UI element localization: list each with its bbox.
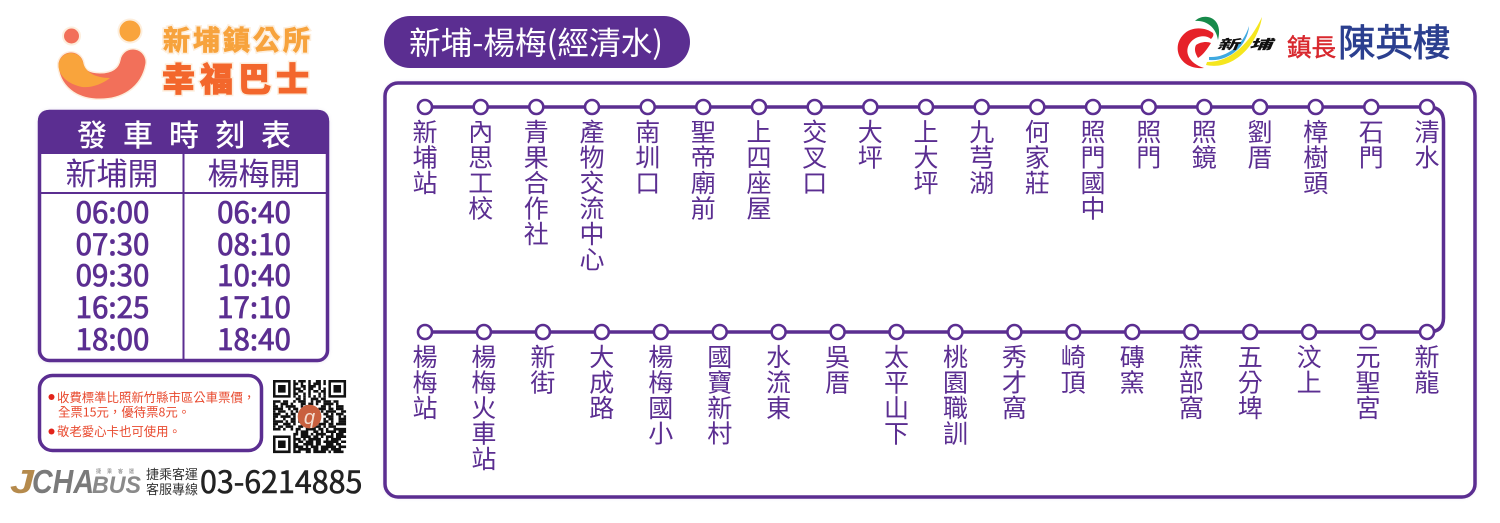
logo: JCHA bus: 捷乘客運 bbox=[96, 468, 140, 475]
stop: 楊梅站: 梅 bbox=[412, 364, 438, 400]
stop: 楊梅火車站: 車 bbox=[471, 414, 496, 450]
stop: 樟樹頭: 樹 bbox=[1303, 138, 1328, 174]
stop: 九芎湖: 九 bbox=[969, 113, 994, 149]
mayor title: 鎮長 bbox=[1287, 29, 1336, 64]
stop: 上四座屋: 四 bbox=[746, 138, 772, 174]
stop: 上四座屋: 屋 bbox=[746, 190, 772, 226]
stop: 產物交流中心: 心 bbox=[579, 240, 605, 276]
stop: 照鏡: 照 bbox=[1192, 113, 1217, 149]
departures from Yangmei: 17:10 bbox=[217, 285, 291, 327]
stop: 上大坪: 上 bbox=[913, 113, 939, 149]
stop: 太平山下 bbox=[884, 325, 909, 450]
stop: 新街: 新 bbox=[530, 338, 555, 374]
stop: 照門國中 bbox=[1080, 100, 1106, 226]
logo: JCHA bus bbox=[10, 463, 141, 500]
stop: 樟樹頭 bbox=[1303, 100, 1328, 200]
stop: 桃園職訓: 訓 bbox=[943, 414, 968, 450]
stop: 青果合作社: 果 bbox=[524, 138, 549, 174]
stop: 南圳口 bbox=[635, 100, 660, 200]
departures from Yangmei: 08:10 bbox=[217, 222, 291, 264]
stop: 楊梅國小: 楊 bbox=[648, 338, 673, 374]
stop: 樟樹頭: 頭 bbox=[1303, 164, 1328, 200]
stop: 大坪 bbox=[858, 100, 883, 174]
departures from Xinpu bbox=[76, 190, 149, 359]
stop: 秀才窩: 才 bbox=[1002, 364, 1027, 400]
departures from Yangmei bbox=[217, 190, 291, 359]
route line bbox=[425, 107, 1444, 332]
stop: 交叉口 bbox=[802, 100, 827, 200]
stop: 上大坪 bbox=[913, 100, 939, 200]
stop: 產物交流中心: 交 bbox=[579, 164, 605, 200]
stop: 蔗部窩: 部 bbox=[1179, 364, 1204, 400]
stop: 崎頂 bbox=[1061, 325, 1086, 400]
stop: 吳厝: 厝 bbox=[825, 364, 850, 400]
stop: 大坪: 坪 bbox=[858, 138, 883, 174]
stop: 照門: 門 bbox=[1136, 138, 1161, 174]
stop: 太平山下: 山 bbox=[884, 389, 909, 425]
stop: 青果合作社 bbox=[524, 100, 549, 251]
stop: 桃園職訓 bbox=[943, 325, 968, 450]
stop: 石門: 石 bbox=[1359, 113, 1384, 149]
panel: route map bbox=[385, 83, 1475, 497]
stop: 青果合作社: 合 bbox=[524, 164, 549, 200]
stop: 楊梅火車站: 梅 bbox=[471, 364, 496, 400]
stop: 清水 bbox=[1414, 100, 1440, 174]
stop: 蔗部窩: 蔗 bbox=[1179, 338, 1204, 374]
stop: 五分埤: 分 bbox=[1238, 364, 1263, 400]
stop: 內思工校: 工 bbox=[468, 164, 493, 200]
stop: 新埔站: 埔 bbox=[412, 138, 438, 174]
stop: 上四座屋: 上 bbox=[746, 113, 772, 149]
stop: 大成路: 成 bbox=[589, 364, 614, 400]
stop: 楊梅站 bbox=[412, 325, 438, 425]
stop: 楊梅國小: 國 bbox=[648, 389, 673, 425]
stop: 新街 bbox=[530, 325, 555, 400]
icon: smiling face bbox=[58, 20, 142, 87]
departures from Xinpu: 09:30 bbox=[76, 253, 149, 295]
stop: 內思工校: 思 bbox=[468, 138, 493, 174]
stop: 蔗部窩 bbox=[1179, 325, 1204, 425]
departures from Xinpu: 16:25 bbox=[76, 285, 149, 327]
stop: 新龍: 新 bbox=[1414, 338, 1440, 374]
stop: 產物交流中心: 流 bbox=[579, 190, 605, 226]
stop: 大成路: 路 bbox=[589, 389, 614, 425]
stop: 何家莊: 家 bbox=[1025, 138, 1050, 174]
stop: 新埔站: 站 bbox=[412, 164, 438, 200]
logo: JCHA bus: J bbox=[10, 463, 35, 500]
departures from Yangmei: 06:40 bbox=[217, 190, 291, 232]
stop: 汶上: 汶 bbox=[1297, 338, 1322, 374]
stop: 上大坪: 坪 bbox=[913, 164, 939, 200]
logo text: happiness bus: 幸福巴士 bbox=[162, 53, 314, 101]
column heading: from Yangmei: 楊梅開 bbox=[208, 149, 300, 194]
stop: 交叉口: 交 bbox=[802, 113, 827, 149]
stop: 內思工校: 內 bbox=[468, 113, 493, 149]
stop: 青果合作社: 作 bbox=[524, 190, 549, 226]
stop: 國寶新村: 新 bbox=[707, 389, 732, 425]
logo: JCHA bus: BUS bbox=[92, 472, 141, 499]
stop: 劉厝: 厝 bbox=[1247, 138, 1273, 174]
stop: 照門國中: 門 bbox=[1080, 138, 1106, 174]
icon: Xinpu township emblem: 埔 bbox=[1249, 34, 1277, 53]
stop: 聖帝廟前: 帝 bbox=[691, 138, 716, 174]
stop: 南圳口: 口 bbox=[635, 164, 660, 200]
stop: 國寶新村: 寶 bbox=[707, 364, 732, 400]
stop: 產物交流中心: 物 bbox=[579, 138, 605, 174]
stop: 新埔站 bbox=[412, 100, 438, 200]
icon: Xinpu township emblem bbox=[1178, 17, 1277, 68]
stop: 楊梅站: 楊 bbox=[412, 338, 438, 374]
stop: 楊梅火車站: 楊 bbox=[471, 338, 496, 374]
stop: 照鏡 bbox=[1192, 100, 1217, 174]
departures from Yangmei: 18:40 bbox=[217, 317, 291, 359]
route title pill: 新埔-楊梅(經清水) bbox=[409, 18, 663, 64]
stop: 內思工校: 校 bbox=[468, 190, 493, 226]
stop: 產物交流中心 bbox=[579, 100, 605, 276]
stop: 照鏡: 鏡 bbox=[1192, 138, 1217, 174]
stop: 楊梅國小 bbox=[648, 325, 673, 450]
departures from Xinpu: 18:00 bbox=[76, 317, 149, 359]
stop: 五分埤 bbox=[1238, 325, 1263, 425]
stop: 何家莊: 莊 bbox=[1025, 164, 1050, 200]
timetable heading: 發車時刻表 bbox=[77, 111, 307, 155]
stop: 水流東: 東 bbox=[766, 389, 791, 425]
stop: 五分埤: 五 bbox=[1238, 338, 1263, 374]
panel: fare notes bbox=[40, 376, 262, 450]
stop: 國寶新村: 國 bbox=[707, 338, 732, 374]
stop: 太平山下: 平 bbox=[884, 364, 909, 400]
stop: 照門 bbox=[1136, 100, 1161, 174]
service hotline label bbox=[146, 464, 198, 498]
outbound stops: Xinpu to Qingshui bbox=[412, 100, 1440, 276]
stop: 桃園職訓: 桃 bbox=[943, 338, 968, 374]
emblem text: 新 bbox=[1217, 34, 1242, 53]
note: fare standard bbox=[48, 388, 255, 420]
stop: 照門國中: 照 bbox=[1080, 113, 1106, 149]
departures from Yangmei: 10:40 bbox=[217, 253, 291, 295]
note: fare standard: 收費標準比照新竹縣市區公車票價， bbox=[57, 388, 255, 406]
stop: 水流東: 水 bbox=[766, 338, 791, 374]
stop: 水流東: 流 bbox=[766, 364, 791, 400]
stop: 青果合作社: 青 bbox=[524, 113, 549, 149]
stop: 秀才窩 bbox=[1002, 325, 1027, 425]
stop: 汶上 bbox=[1297, 325, 1322, 400]
stop: 九芎湖: 湖 bbox=[969, 164, 994, 200]
stop: 交叉口: 叉 bbox=[802, 138, 827, 174]
stop: 元聖宮: 宮 bbox=[1355, 389, 1381, 425]
stop: 樟樹頭: 樟 bbox=[1303, 113, 1328, 149]
stop: 秀才窩: 秀 bbox=[1002, 338, 1027, 374]
stop: 聖帝廟前: 前 bbox=[691, 190, 716, 226]
stop: 元聖宮: 元 bbox=[1355, 338, 1381, 374]
stop: 石門: 門 bbox=[1359, 138, 1384, 174]
note: fare standard: 全票15元，優待票8元。 bbox=[58, 402, 190, 420]
stop: 楊梅國小: 梅 bbox=[648, 364, 673, 400]
stop: 蔗部窩: 窩 bbox=[1179, 389, 1204, 425]
logo: happiness bus bbox=[58, 19, 314, 101]
stop: 南圳口: 圳 bbox=[635, 138, 660, 174]
stop: 楊梅國小: 小 bbox=[648, 414, 673, 450]
return stops: Xinlong to Yangmei bbox=[412, 325, 1440, 476]
QR code bbox=[273, 380, 346, 453]
stop: 劉厝: 劉 bbox=[1247, 113, 1273, 149]
stop: 上四座屋 bbox=[746, 100, 772, 226]
stop: 桃園職訓: 園 bbox=[943, 364, 968, 400]
QR code: q bbox=[304, 407, 316, 429]
stop: 聖帝廟前 bbox=[691, 100, 716, 226]
stop: 國寶新村 bbox=[707, 325, 732, 450]
stop: 太平山下: 太 bbox=[884, 338, 909, 374]
stop: 劉厝 bbox=[1247, 100, 1273, 174]
stop: 上四座屋: 座 bbox=[746, 164, 772, 200]
stop: 桃園職訓: 職 bbox=[943, 389, 968, 425]
stop: 照門: 照 bbox=[1136, 113, 1161, 149]
stop: 太平山下: 下 bbox=[884, 414, 909, 450]
stop: 楊梅站: 站 bbox=[412, 389, 438, 425]
stop: 青果合作社: 社 bbox=[524, 215, 549, 251]
panel: timetable bbox=[38, 110, 329, 361]
stop: 大成路 bbox=[589, 325, 614, 425]
service hotline label: 捷乘客運 bbox=[146, 464, 198, 483]
stop: 吳厝 bbox=[825, 325, 850, 400]
phone number: 03-6214885 bbox=[200, 458, 362, 502]
logo text: township office: 新埔鎮公所 bbox=[163, 19, 313, 58]
logo: JCHA bus: CHA bbox=[32, 463, 94, 500]
stop: 產物交流中心: 中 bbox=[579, 215, 605, 251]
stop: 九芎湖 bbox=[969, 100, 994, 200]
stop: 何家莊 bbox=[1025, 100, 1050, 200]
stop: 九芎湖: 芎 bbox=[969, 138, 994, 174]
stop: 楊梅火車站: 火 bbox=[471, 389, 496, 425]
stop: 崎頂: 崎 bbox=[1061, 338, 1086, 374]
stop: 秀才窩: 窩 bbox=[1002, 389, 1027, 425]
stop: 南圳口: 南 bbox=[635, 113, 660, 149]
stop: 磚窯: 窯 bbox=[1120, 364, 1145, 400]
stop: 國寶新村: 村 bbox=[707, 414, 732, 450]
stop: 照門國中: 中 bbox=[1080, 190, 1106, 226]
stop: 元聖宮 bbox=[1355, 325, 1381, 425]
stop: 清水: 水 bbox=[1414, 138, 1440, 174]
stop: 內思工校 bbox=[468, 100, 493, 226]
stop: 清水: 清 bbox=[1414, 113, 1440, 149]
stop: 新街: 街 bbox=[530, 364, 555, 400]
stop: 大成路: 大 bbox=[589, 338, 614, 374]
stop: 何家莊: 何 bbox=[1025, 113, 1050, 149]
note: senior card: 敬老愛心卡也可使用。 bbox=[57, 422, 181, 440]
stop: 交叉口: 口 bbox=[802, 164, 827, 200]
stop: 聖帝廟前: 聖 bbox=[691, 113, 716, 149]
stop: 五分埤: 埤 bbox=[1238, 389, 1263, 425]
mayor name: 陳英樓 bbox=[1338, 12, 1450, 67]
stop: 石門 bbox=[1359, 100, 1384, 174]
logo text: township office: 新埔鎮公所 bbox=[163, 19, 313, 58]
stop: 新龍: 龍 bbox=[1414, 364, 1440, 400]
stop: 聖帝廟前: 廟 bbox=[691, 164, 716, 200]
stop: 吳厝: 吳 bbox=[825, 338, 850, 374]
stop: 楊梅火車站 bbox=[471, 325, 496, 476]
operator contact bbox=[10, 458, 362, 502]
stop: 汶上: 上 bbox=[1297, 364, 1322, 400]
stop: 新龍 bbox=[1414, 325, 1440, 400]
stop: 新埔站: 新 bbox=[412, 113, 438, 149]
logo text: happiness bus: 幸福巴士 bbox=[162, 53, 314, 101]
township and mayor logo bbox=[1178, 12, 1450, 68]
stop: 水流東 bbox=[766, 325, 791, 425]
stop: 元聖宮: 聖 bbox=[1355, 364, 1381, 400]
stop: 崎頂: 頂 bbox=[1061, 364, 1086, 400]
service hotline label: 客服專線 bbox=[146, 479, 198, 498]
stop: 楊梅火車站: 站 bbox=[471, 440, 496, 476]
departures from Xinpu: 06:00 bbox=[76, 190, 149, 232]
departures from Xinpu: 07:30 bbox=[76, 222, 149, 264]
stop: 產物交流中心: 產 bbox=[579, 113, 605, 149]
stop: 磚窯: 磚 bbox=[1120, 338, 1145, 374]
stop: 上大坪: 大 bbox=[913, 138, 939, 174]
stop: 大坪: 大 bbox=[858, 113, 883, 149]
stop: 磚窯 bbox=[1120, 325, 1145, 400]
stop: 照門國中: 國 bbox=[1080, 164, 1106, 200]
column heading: from Xinpu: 新埔開 bbox=[66, 149, 158, 194]
